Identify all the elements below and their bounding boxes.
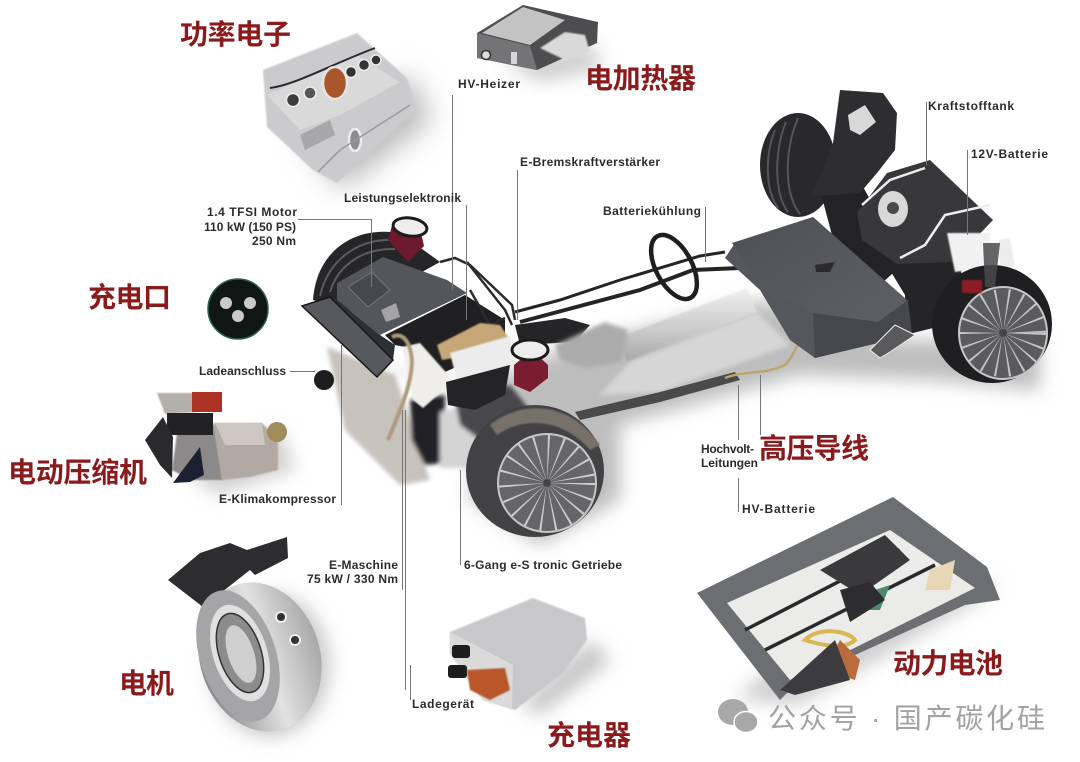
German callout labels: E-Maschine: [329, 558, 398, 572]
label: electric compressor: 电动压缩机: [8, 457, 147, 488]
beige intake manifold: [437, 323, 510, 360]
German callout labels: 6-Gang e-S tronic Getriebe: [464, 558, 622, 572]
German callout labels: [199, 77, 1048, 711]
label: high voltage lines: 高压导线: [759, 433, 869, 464]
12V battery area: [947, 233, 1015, 272]
rear wheel: [932, 265, 1052, 383]
fuel tank: [857, 160, 993, 264]
German callout labels: Ladeanschluss: [199, 364, 286, 378]
German callout labels: Hochvolt-: [701, 442, 754, 456]
rear cross member: [885, 262, 965, 335]
engine cover: [330, 257, 467, 360]
leader lines: [290, 95, 968, 700]
side sill bar with high voltage cable: [575, 340, 803, 420]
label: charge port: 充电口: [88, 282, 171, 313]
German callout labels: E-Klimakompressor: [219, 492, 336, 506]
rear red component and column: [962, 243, 1000, 293]
engine block and gearbox: [327, 347, 530, 485]
label: power electronics: 功率电子: [180, 19, 291, 50]
front right suspension spring: [512, 340, 548, 392]
label: on-board charger: 充电器: [547, 720, 631, 751]
component: HV heater: [477, 5, 600, 82]
drive tunnel and exhaust tube: [620, 288, 757, 362]
watermark: 公众号 · 国产碳化硅: [768, 703, 1045, 734]
component: traction battery: [697, 497, 1000, 705]
steering column and arms: [515, 252, 740, 368]
component: electric compressor: [145, 392, 295, 495]
German callout labels: 12V-Batterie: [971, 147, 1048, 161]
label: HV heater: 电加热器: [585, 63, 696, 94]
gearbox dark parts: [446, 365, 510, 410]
rear underfloor tub: [725, 217, 912, 358]
label: traction battery: 动力电池: [893, 648, 1003, 679]
German callout labels: HV-Batterie: [742, 502, 815, 516]
front right wheel: [466, 405, 604, 537]
German callout labels: 250 Nm: [252, 234, 296, 248]
German callout labels: 110 kW (150 PS): [204, 220, 296, 234]
German callout labels: Ladegerät: [412, 697, 474, 711]
rear mount bracket: [870, 325, 915, 358]
ground shadow: [330, 300, 1040, 545]
rear suspension linkage: [820, 185, 905, 285]
front left suspension top: [388, 216, 428, 262]
component: charge port: [208, 279, 268, 339]
front left tyre: [313, 232, 440, 312]
rear strut tower: [812, 90, 897, 196]
white coolant tank: [450, 336, 514, 385]
rear left tyre: [760, 113, 836, 217]
German callout labels: 75 kW / 330 Nm: [307, 572, 398, 586]
label: electric motor: 电机: [119, 668, 174, 699]
radiator panel: [302, 297, 393, 377]
vehicle chassis illustration: [302, 90, 1052, 545]
engine bay hoses and frame: [440, 258, 515, 325]
German callout labels: Leistungselektronik: [344, 191, 461, 205]
engine bay dark mass: [385, 295, 505, 372]
German callout labels: Batteriekühlung: [603, 204, 701, 218]
icon: WeChat: [718, 699, 758, 732]
component: electric motor: [168, 537, 341, 748]
German callout labels: HV-Heizer: [458, 77, 520, 91]
charge socket on car: [314, 370, 334, 390]
strut bracket: [848, 105, 876, 135]
German callout labels: 1.4 TFSI Motor: [207, 205, 297, 219]
steering wheel: [642, 228, 706, 306]
German callout labels: Leitungen: [701, 456, 758, 470]
German callout labels: E-Bremskraftverstärker: [520, 155, 660, 169]
component: power electronics: [263, 33, 432, 190]
German callout labels: Kraftstofftank: [928, 99, 1014, 113]
component: on-board charger: [448, 598, 612, 715]
white reservoir with beige hose: [388, 336, 450, 440]
